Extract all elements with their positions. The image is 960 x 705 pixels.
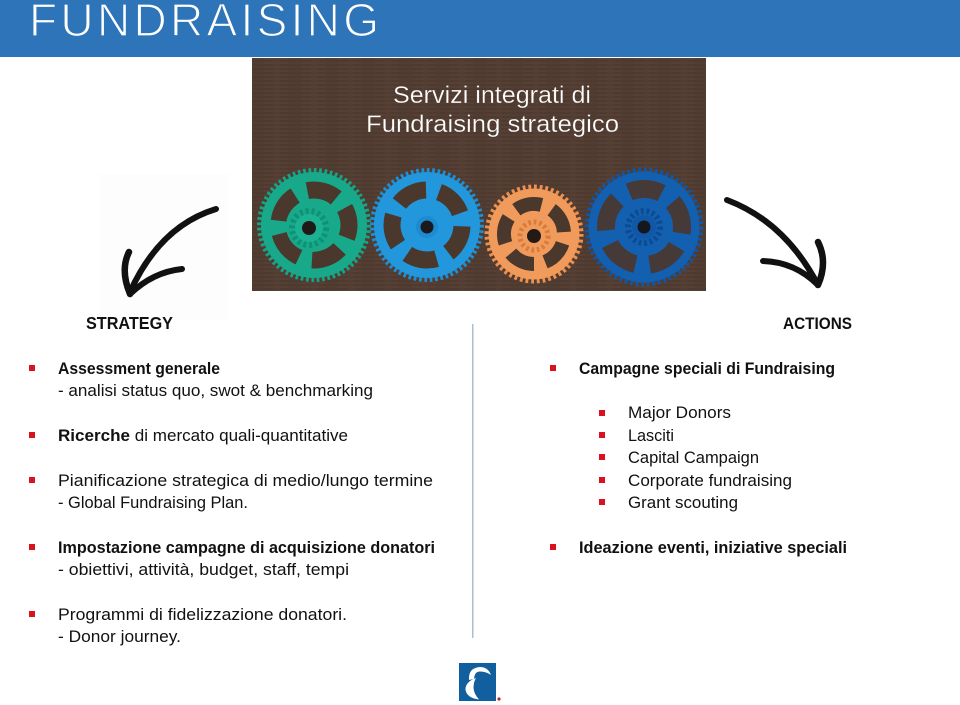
item: assessment: - analisi status quo, swot & benchmarking [58,382,373,400]
orange gear [487,187,581,281]
arrow: left, to strategy [100,174,228,320]
sub-list: campaign types [599,404,792,512]
header band [0,0,960,57]
item: assessment [29,360,373,400]
photo caption: Servizi integrati di [393,82,591,109]
green gear [260,170,368,280]
item: ideazione: Ideazione eventi, iniziative speciali [579,539,847,557]
sub-list: campaign types: Grant scouting [628,494,738,512]
heading: strategy: STRATEGY [86,313,173,333]
item: impostazione: - obiettivi, attività, budget, staff, tempi [58,561,349,579]
panel: strategy list [29,360,435,646]
photo panel: gears on wood [252,58,706,291]
item: ricerche: Ricerche di mercato quali-quantitative [58,427,348,445]
sub-list: campaign types: Capital Campaign [628,449,759,467]
item: programmi: Programmi di fidelizzazione donatori. [58,606,347,624]
logo [459,663,501,701]
item: programmi: - Donor journey. [58,628,181,646]
heading: actions: ACTIONS [783,315,852,333]
item: pianificazione: - Global Fundraising Plan. [58,494,248,512]
panel: actions list [550,360,847,557]
photo caption [366,82,619,138]
item: pianificazione [29,472,433,512]
item: campagne speciali: Campagne speciali di Fundraising [579,360,835,378]
light blue gear [372,170,482,280]
item: impostazione [29,539,435,579]
item: impostazione: Impostazione campagne di acquisizione donatori [58,539,435,557]
sub-list: campaign types: Corporate fundraising [628,472,792,490]
item: assessment: Assessment generale [58,360,220,378]
sub-list: campaign types: Major Donors [628,404,731,422]
arrow: right, to actions [727,200,823,285]
item: programmi [29,606,347,646]
item: pianificazione: Pianificazione strategica di medio/lungo termine [58,472,433,490]
photo caption: Fundraising strategico [366,111,619,138]
sub-list: campaign types: Lasciti [628,427,674,445]
dark blue gear [587,170,701,284]
